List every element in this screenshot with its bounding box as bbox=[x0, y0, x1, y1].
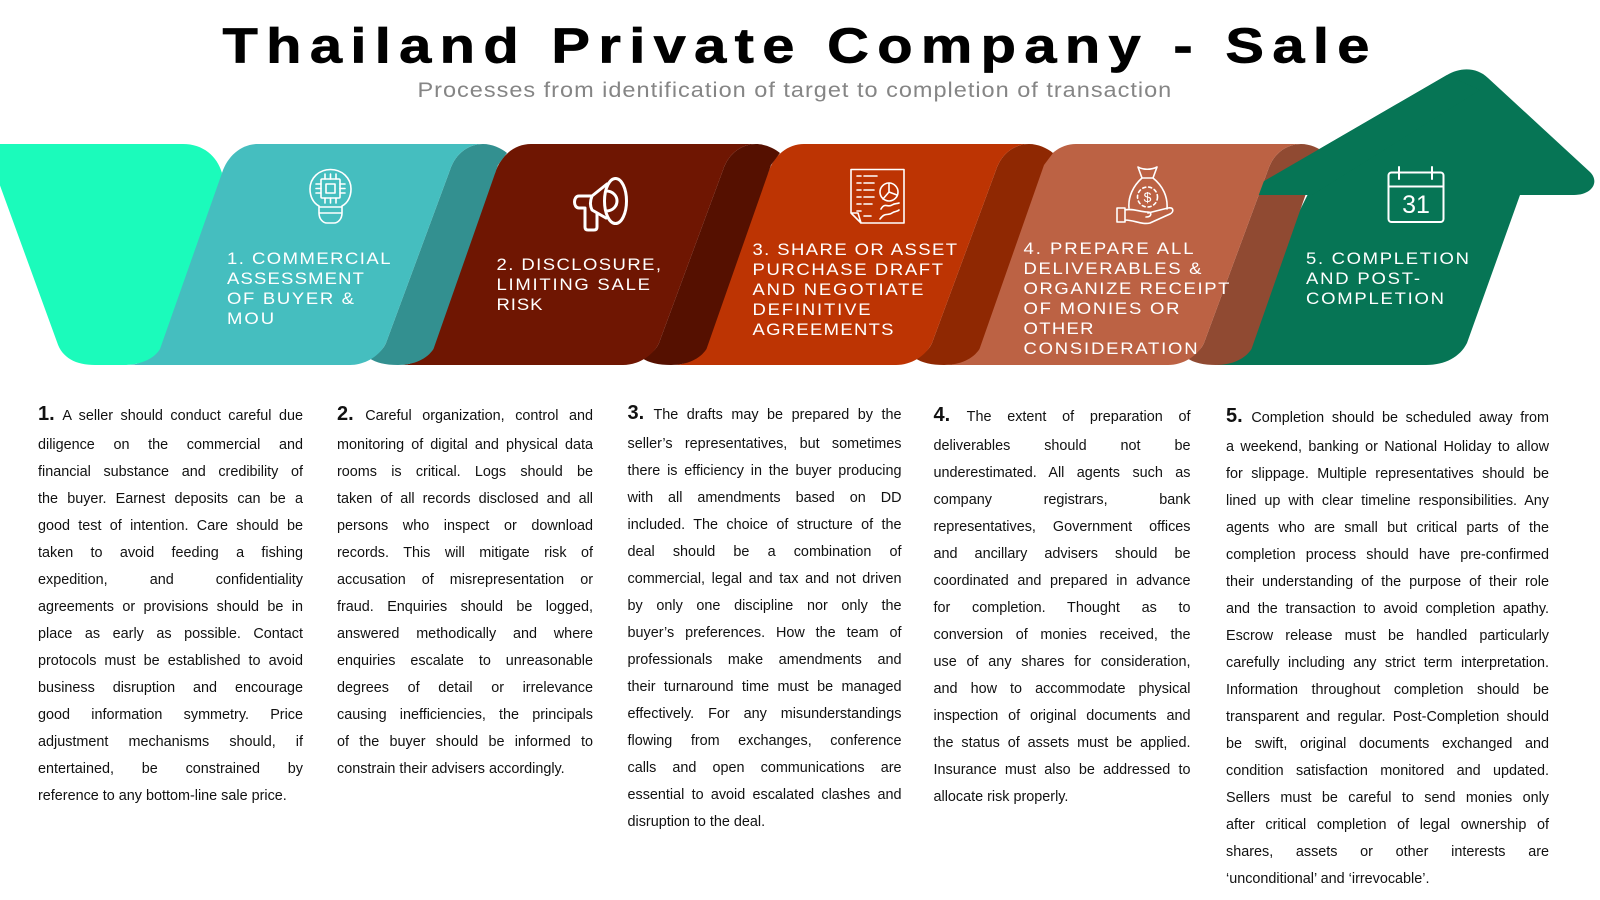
text column 4: and how to accommodate physical bbox=[934, 681, 1190, 697]
text column 1: reference to any bottom-line sale price. bbox=[38, 788, 287, 804]
text column 5: shares, assets or other interests are bbox=[1226, 844, 1549, 860]
label: step 3: PURCHASE DRAFT bbox=[752, 260, 943, 279]
text column 4: allocate risk properly. bbox=[934, 789, 1068, 805]
label: step 3: 3. SHARE OR ASSET bbox=[752, 240, 957, 259]
text column 1: protocols must be established to avoid bbox=[38, 653, 303, 669]
text column 2: monitoring of digital and physical data bbox=[337, 437, 593, 453]
text column 3: included. The choice of structure of the bbox=[628, 517, 902, 533]
text column 4: for completion. Thought as to bbox=[934, 600, 1190, 616]
text column 5: lined up with clear timeline responsibilities. Any bbox=[1226, 493, 1549, 509]
text column 3: professionals make amendments and bbox=[628, 652, 902, 668]
text column 4: underestimated. All agents such as bbox=[934, 465, 1190, 481]
label: step 2: RISK bbox=[496, 295, 543, 314]
icon: money bag in hand bbox=[1117, 167, 1173, 223]
text column 2: taken of all records disclosed and all bbox=[337, 491, 593, 507]
text column 5: Escrow release must be handled particularly bbox=[1226, 628, 1549, 644]
text column 5: Sellers must be careful to send monies only bbox=[1226, 790, 1549, 806]
label: step 5: AND POST- bbox=[1306, 269, 1420, 288]
text column 2: constrain their advisers accordingly. bbox=[337, 761, 565, 777]
text column 4: inspection of original documents and bbox=[934, 708, 1190, 724]
label: step 2: 2. DISCLOSURE, bbox=[496, 255, 661, 274]
text column 3 bbox=[628, 402, 902, 830]
text column 4 bbox=[934, 404, 1191, 805]
title: Thailand Private Company - Sale bbox=[222, 19, 1369, 73]
text column 1: entertained, be constrained by bbox=[38, 761, 303, 777]
text column 2: 2. Careful organization, control and bbox=[337, 403, 593, 425]
step 3: share or asset purchase bbox=[674, 144, 1053, 365]
text column 3: deal should be a combination of bbox=[628, 544, 902, 560]
text column 5: be swift, original documents exchanged and bbox=[1226, 736, 1549, 752]
text column 5 bbox=[1226, 405, 1550, 887]
text column 5: their understanding of the purpose of their role bbox=[1226, 574, 1549, 590]
text column 3: by only one discipline nor only the bbox=[628, 598, 902, 614]
text column 1: business disruption and encourage bbox=[38, 680, 303, 696]
label: step 4: ORGANIZE RECEIPT bbox=[1024, 279, 1230, 298]
text column 2: degrees of detail or irrelevance bbox=[337, 680, 593, 696]
icon: calendar bbox=[1388, 167, 1444, 222]
text column 3: disruption to the deal. bbox=[628, 814, 765, 830]
text column 5: ‘unconditional’ and ‘irrevocable’. bbox=[1226, 871, 1429, 887]
label: step 1: 1. COMMERCIAL bbox=[227, 249, 391, 268]
text column 4: deliverables should not be bbox=[934, 438, 1190, 454]
text column 5: transparent and regular. Post-Completion should bbox=[1226, 709, 1549, 725]
text column 4: conversion of monies received, the bbox=[934, 627, 1190, 643]
label: step 4: CONSIDERATION bbox=[1024, 339, 1198, 358]
text column 3: flowing from exchanges, conference bbox=[628, 733, 902, 749]
text column 2: fraud. Enquiries should be logged, bbox=[337, 599, 593, 615]
text column 4: Insurance must also be addressed to bbox=[934, 762, 1190, 778]
icon: megaphone bbox=[574, 178, 626, 230]
label: step 4: OF MONIES OR bbox=[1024, 299, 1180, 318]
label: step 4: 4. PREPARE ALL bbox=[1024, 239, 1194, 258]
text column 1: taken to avoid feeding a fishing bbox=[38, 545, 303, 561]
text column 3: with all amendments based on DD bbox=[628, 490, 902, 506]
text column 1: place as early as possible. Contact bbox=[38, 626, 303, 642]
text column 4: and ancillary advisers should be bbox=[934, 546, 1190, 562]
text column 2: causing inefficiencies, the principals bbox=[337, 707, 593, 723]
text column 2: persons who inspect or download bbox=[337, 518, 593, 534]
text column 3: seller’s representatives, but sometimes bbox=[628, 436, 902, 452]
step 5: completion arrow bbox=[1217, 69, 1594, 365]
label: step 3: AND NEGOTIATE bbox=[752, 280, 924, 299]
text column 1: financial substance and credibility of bbox=[38, 464, 303, 480]
text column 2: answered methodically and where bbox=[337, 626, 593, 642]
text column 2: of the buyer should be informed to bbox=[337, 734, 593, 750]
text column 5: after critical completion of legal ownership of bbox=[1226, 817, 1549, 833]
text column 4: company registrars, bank bbox=[934, 492, 1190, 508]
text column 4: coordinated and prepared in advance bbox=[934, 573, 1190, 589]
icon: calendar: 31 bbox=[1402, 191, 1430, 219]
text column 1: the buyer. Earnest deposits can be a bbox=[38, 491, 303, 507]
text column 2: records. This will mitigate risk of bbox=[337, 545, 593, 561]
infographic band with title and process steps bbox=[0, 19, 1594, 365]
label: step 1: OF BUYER & bbox=[227, 289, 354, 308]
label: step 3: AGREEMENTS bbox=[752, 320, 894, 339]
text column 4: 4. The extent of preparation of bbox=[934, 404, 1190, 426]
text column 4: use of any shares for consideration, bbox=[934, 654, 1190, 670]
text column 5: 5. Completion should be scheduled away from bbox=[1226, 405, 1549, 427]
text column 2: enquiries escalate to unreasonable bbox=[337, 653, 593, 669]
text column 1: adjustment mechanisms should, if bbox=[38, 734, 303, 750]
step 2: disclosure bbox=[401, 144, 780, 365]
text column 3: their turnaround time must be managed bbox=[628, 679, 902, 695]
text column 4: the status of assets must be applied. bbox=[934, 735, 1190, 751]
icon: money bag in hand: $ bbox=[1144, 189, 1152, 205]
label: step 3: DEFINITIVE bbox=[752, 300, 871, 319]
label: step 4: OTHER bbox=[1024, 319, 1094, 338]
text column 3: buyer’s preferences. How the team of bbox=[628, 625, 902, 641]
text column 3: effectively. For any misunderstandings bbox=[628, 706, 902, 722]
text column 5: for slippage. Multiple representatives should be bbox=[1226, 466, 1549, 482]
icon: report document bbox=[851, 170, 904, 223]
text column 1: agreements or provisions should be in bbox=[38, 599, 303, 615]
start block: mint tab bbox=[0, 144, 222, 365]
label: step 2: LIMITING SALE bbox=[496, 275, 650, 294]
text column 5: completion process should have pre-confirmed bbox=[1226, 547, 1549, 563]
text column 3: commercial, legal and tax and not driven bbox=[628, 571, 902, 587]
text column 3: calls and open communications are bbox=[628, 760, 902, 776]
label: step 1: MOU bbox=[227, 309, 274, 328]
text column 1: expedition, and confidentiality bbox=[38, 572, 303, 588]
text column 3: 3. The drafts may be prepared by the bbox=[628, 402, 902, 424]
text column 1: diligence on the commercial and bbox=[38, 437, 303, 453]
text column 1: 1. A seller should conduct careful due bbox=[38, 403, 303, 425]
text column 2: rooms is critical. Logs should be bbox=[337, 464, 593, 480]
label: step 5: 5. COMPLETION bbox=[1306, 249, 1469, 268]
text column 5: agents who are small but critical parts of the bbox=[1226, 520, 1549, 536]
text column 4: representatives, Government offices bbox=[934, 519, 1190, 535]
text column 5: condition satisfaction monitored and updated. bbox=[1226, 763, 1549, 779]
text column 1: good information symmetry. Price bbox=[38, 707, 303, 723]
text column 3: there is efficiency in the buyer producing bbox=[628, 463, 902, 479]
text column 5: Information throughout completion should be bbox=[1226, 682, 1549, 698]
label: step 5: COMPLETION bbox=[1306, 289, 1444, 308]
text column 5: and the transaction to avoid completion apathy. bbox=[1226, 601, 1549, 617]
step 1: commercial assessment bbox=[128, 144, 507, 365]
label: step 4: DELIVERABLES & bbox=[1024, 259, 1202, 278]
text column 5: a weekend, banking or National Holiday to allow bbox=[1226, 439, 1549, 455]
icon: light bulb with chip bbox=[310, 170, 351, 223]
step 4: prepare deliverables bbox=[946, 75, 1480, 365]
label: step 1: ASSESSMENT bbox=[227, 269, 364, 288]
text column 2 bbox=[337, 403, 594, 777]
subtitle: Processes from identification of target to completion of transaction bbox=[418, 78, 1171, 102]
text column 2: accusation of misrepresentation or bbox=[337, 572, 593, 588]
text column 3: essential to avoid escalated clashes and bbox=[628, 787, 902, 803]
text column 1 bbox=[38, 403, 304, 804]
text column 1: good test of intention. Care should be bbox=[38, 518, 303, 534]
text column 5: carefully including any strict term interpretation. bbox=[1226, 655, 1549, 671]
